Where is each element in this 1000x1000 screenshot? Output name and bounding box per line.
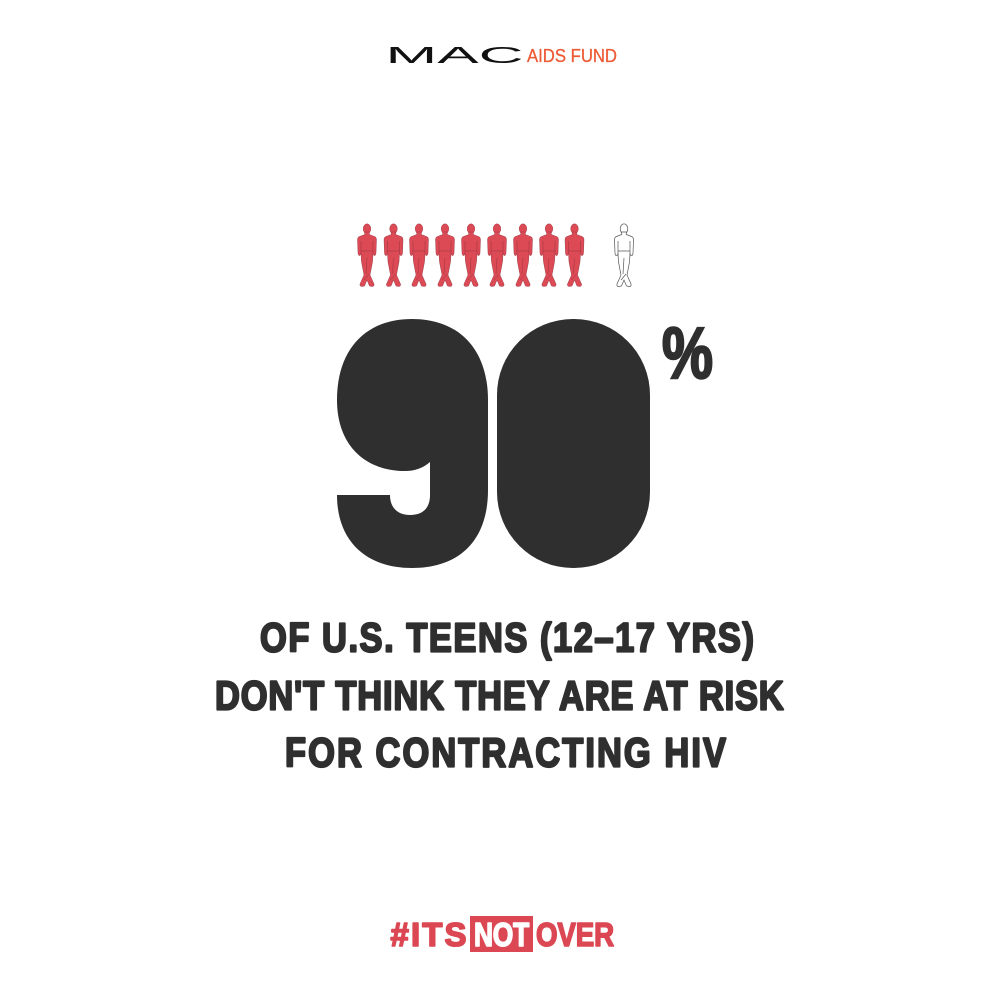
percent sign: % bbox=[662, 314, 713, 394]
line 2: DON'T THINK THEY ARE AT RISK bbox=[215, 674, 784, 719]
digit 0: 0 bbox=[513, 277, 634, 578]
hashtag box bbox=[470, 916, 533, 952]
hashtag NOT: NOT bbox=[474, 917, 529, 954]
digit 9 bbox=[337, 302, 488, 568]
logo text: AIDS FUND: AIDS FUND bbox=[527, 45, 617, 66]
hashtag start: #ITS bbox=[390, 916, 466, 953]
hashtag end: OVER bbox=[536, 917, 614, 954]
digit 9: 9 bbox=[352, 302, 472, 492]
logo: MAC AIDS Fund bbox=[386, 42, 617, 68]
pictogram: 9 of 10 teens bbox=[358, 224, 634, 286]
icon: one outlined figure bbox=[614, 224, 634, 286]
hashtag: #ITSNOTOVER bbox=[390, 916, 614, 954]
logo wordmark: MAC: MAC bbox=[386, 42, 524, 68]
line 3: FOR CONTRACTING HIV bbox=[285, 731, 726, 776]
icons: nine red figures bbox=[358, 224, 584, 286]
statement text bbox=[215, 616, 784, 776]
big number: 90% bbox=[337, 277, 713, 578]
line 1: OF U.S. TEENS (12–17 YRS) bbox=[260, 616, 754, 661]
